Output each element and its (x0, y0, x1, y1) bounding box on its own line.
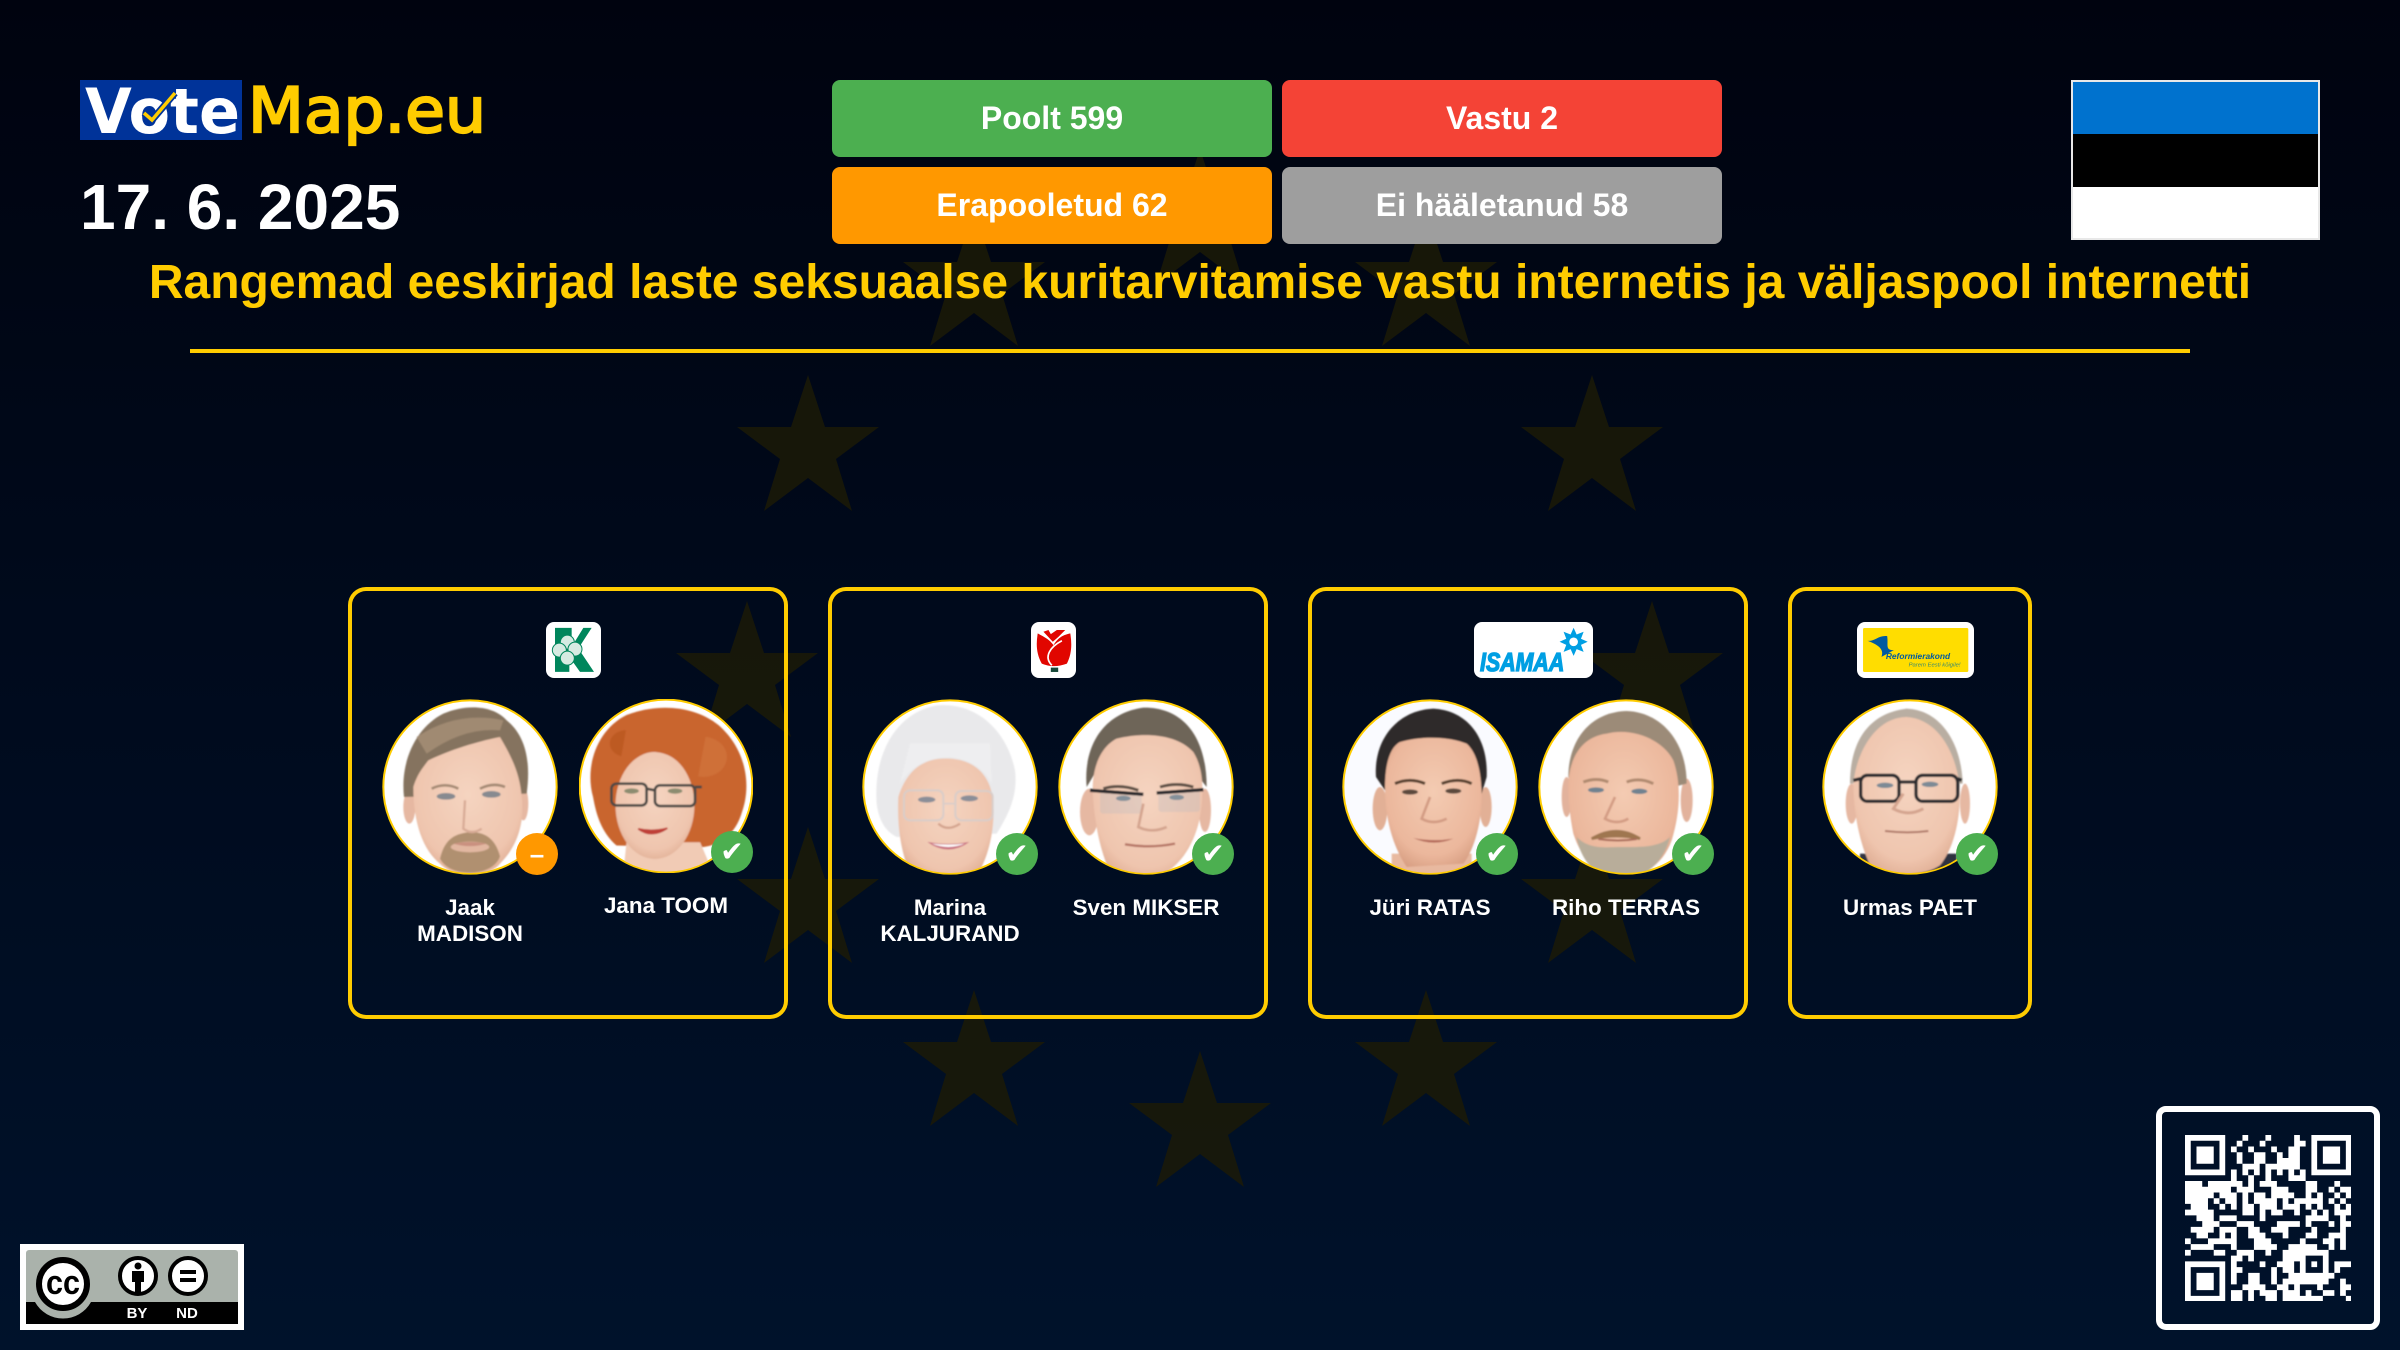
name: Jaak Madison (417, 894, 523, 946)
panel: Isamaa (1308, 587, 1748, 1019)
vote badge: for (1672, 833, 1714, 875)
party logo: Reformierakond: Reformierakond (1886, 651, 1951, 661)
panel: Reformierakond (1788, 587, 2032, 1019)
button: abstain: Erapooletud 62 (936, 187, 1168, 223)
vote badge: abstain: – (530, 839, 544, 869)
portrait: Urmas Paet (1822, 699, 1998, 875)
name: Urmas Paet: Urmas PAET (1843, 894, 1977, 920)
vote badge: for: ✔ (1681, 837, 1705, 870)
vote badge: for (711, 831, 753, 873)
name: Jaak Madison: MADISON (417, 921, 523, 946)
QR code (2156, 1106, 2380, 1330)
portrait: Riho Terras (1538, 699, 1714, 875)
button: for: Poolt 599 (981, 100, 1123, 136)
vote badge: for: ✔ (1965, 837, 1989, 870)
button: against: Vastu 2 (1446, 100, 1558, 136)
name: Jaak Madison: Jaak (445, 894, 495, 920)
name: Marina Kaljurand: KALJURAND (880, 921, 1020, 946)
party logo: Reformierakond (1857, 622, 1974, 678)
button: for (832, 80, 1272, 157)
party logo: Isamaa (1474, 622, 1593, 678)
vote badge: abstain (516, 833, 558, 875)
vote badge: for (1956, 833, 1998, 875)
party logo: Reformierakond: Parem Eesti kõigile! (1909, 662, 1961, 668)
name: Sven Mikser: Sven MIKSER (1073, 894, 1219, 920)
date: 17. 6. 2025 (80, 171, 400, 243)
button: not voted: Ei hääletanud 58 (1376, 187, 1628, 223)
name: Juri Ratas: Jüri RATAS (1369, 894, 1491, 920)
button: abstain (832, 167, 1272, 244)
portrait: Juri Ratas (1342, 699, 1518, 875)
portrait: Marina Kaljurand (862, 699, 1038, 875)
license badge: CC BY-ND: ND (176, 1305, 198, 1322)
portrait: Jaak Madison (382, 699, 558, 875)
portrait: Sven Mikser (1058, 699, 1234, 875)
flag: Estonia (2071, 80, 2320, 240)
vote badge: for: ✔ (720, 835, 744, 868)
name: Marina Kaljurand: Marina (914, 894, 986, 920)
portrait: Jana Toom (579, 699, 753, 873)
vote badge: for (996, 833, 1038, 875)
vote badge: for: ✔ (1201, 837, 1225, 870)
vote counts (832, 80, 1722, 244)
party logo: Sotsiaaldemokraadid (1031, 622, 1076, 678)
name: Riho Terras: Riho TERRAS (1552, 894, 1700, 920)
vote badge: for: ✔ (1005, 837, 1029, 870)
vote badge: for: ✔ (1485, 837, 1509, 870)
panel: Keskerakond (348, 587, 788, 1019)
name: Jana Toom: Jana TOOM (604, 892, 728, 918)
panel: Sotsiaaldemokraadid (828, 587, 1268, 1019)
license badge: CC BY-ND (20, 1244, 244, 1330)
license badge: CC BY-ND: cc (46, 1264, 80, 1302)
name: Marina Kaljurand (880, 894, 1020, 946)
button: against (1282, 80, 1722, 157)
party logo: Isamaa: ISAMAA (1480, 647, 1564, 677)
title: Rangemad eeskirjad laste seksuaalse kuritarvitamise vastu internetis ja väljaspool internetti (149, 256, 2251, 309)
vote badge: for (1476, 833, 1518, 875)
vote badge: for (1192, 833, 1234, 875)
license badge: CC BY-ND: BY (127, 1305, 147, 1322)
button: not voted (1282, 167, 1722, 244)
party logo: Keskerakond (546, 622, 601, 678)
logo: VoteMap.eu (80, 80, 486, 148)
